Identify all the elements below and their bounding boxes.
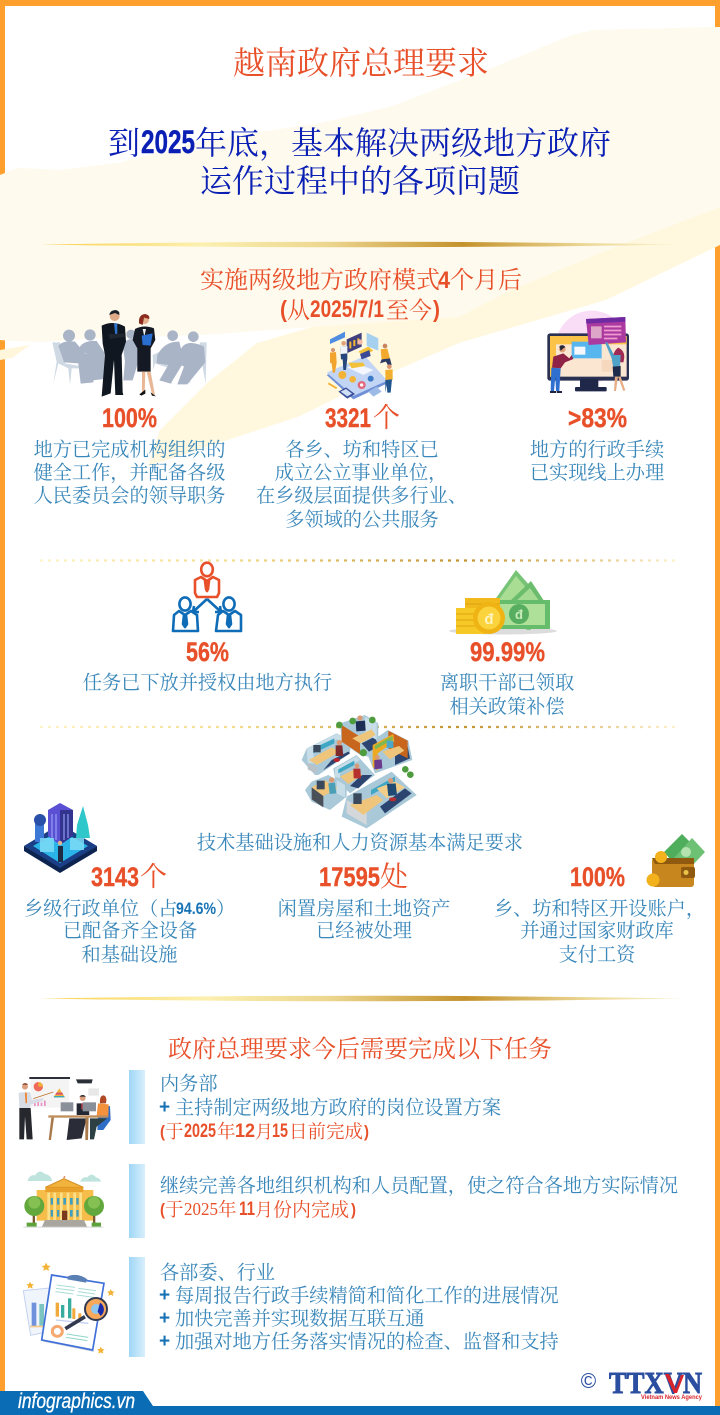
stat: 3143 units xyxy=(24,862,235,966)
section heading: four months: ) xyxy=(433,296,440,322)
stat: 100% accounts: 并通过国家财政库 xyxy=(520,920,674,942)
section heading: four months: 2025/7/1 xyxy=(310,296,384,323)
task text: 月 xyxy=(255,1122,273,1142)
subtitle xyxy=(108,124,611,199)
icon: government building xyxy=(23,1172,104,1228)
task text: 15 xyxy=(272,1121,288,1142)
icon: isometric public services xyxy=(327,332,393,399)
stat: 56% delegated: 56% xyxy=(186,637,229,667)
stat: 100% organisation xyxy=(34,403,225,507)
task text: + xyxy=(159,1097,170,1118)
icon: money and coins xyxy=(449,570,557,634)
section heading: four months: 至今 xyxy=(386,298,432,323)
stat: 17595 sites: 闲置房屋和土地资产 xyxy=(278,898,450,920)
stat: 100% accounts: 100% xyxy=(570,862,625,892)
task text: 内务部 xyxy=(160,1073,218,1095)
stat: 100% organisation: 地方已完成机构组织的 xyxy=(34,439,225,461)
icon: money and coins: đ xyxy=(515,607,523,622)
task text: 2025 xyxy=(184,1121,216,1142)
stat: 3321 public units: 多领域的公共服务 xyxy=(285,509,439,531)
task text: 日前完成 xyxy=(289,1122,363,1143)
icon: smart building xyxy=(24,803,97,873)
stat: 3143 units: 94.6% xyxy=(176,899,216,918)
stat: 3143 units: ） xyxy=(216,898,235,920)
task text: 加强对地方任务落实情况的检查、监督和支持 xyxy=(175,1331,559,1353)
section heading: four months xyxy=(200,267,522,323)
task text: 年 xyxy=(217,1121,236,1143)
accent bar xyxy=(129,1070,145,1144)
task text: 11 xyxy=(239,1199,255,1220)
task 2: organisation xyxy=(23,1164,678,1238)
stat: 3321 public units: 个 xyxy=(373,403,400,433)
task text: 份内完成 xyxy=(273,1199,349,1221)
gold divider xyxy=(40,996,685,1001)
stat: 3321 public units xyxy=(256,403,467,531)
stat: 17595 sites: 已经被处理 xyxy=(316,920,412,942)
icon: money and coins: đ xyxy=(484,611,494,628)
stat: >83% online: 已实现线上办理 xyxy=(530,462,664,484)
task text xyxy=(159,1073,501,1143)
section heading: four months: 从 xyxy=(287,298,310,323)
stat: 99.99% compensation: 离职干部已领取 xyxy=(440,672,574,694)
task text xyxy=(160,1175,678,1221)
logo: TTXVN: TTXVN xyxy=(609,1365,702,1400)
task text: 各部委、行业 xyxy=(160,1262,275,1284)
accent bar xyxy=(129,1164,145,1238)
stat: 3143 units: 和基础设施 xyxy=(82,944,177,966)
task 1: Ministry of Home Affairs xyxy=(19,1070,501,1144)
task text: ) xyxy=(364,1122,369,1141)
task text: 于 xyxy=(165,1122,184,1143)
stat: 100% organisation: 健全工作，并配备各级 xyxy=(34,462,225,484)
stat: 3143 units: 个 xyxy=(140,862,167,892)
stat: 100% accounts: 支付工资 xyxy=(559,944,636,966)
section heading: four months: 个月后 xyxy=(450,267,522,294)
stat: 99.99% compensation: 99.99% xyxy=(470,637,545,667)
section heading: four months: 4 xyxy=(438,267,451,294)
icon: wallet xyxy=(646,834,705,887)
stat: 100% accounts xyxy=(494,862,705,966)
icon: online procedures xyxy=(547,311,629,393)
stat: 3321 public units: 各乡、坊和特区已 xyxy=(285,439,439,461)
task text: 12 xyxy=(235,1121,255,1142)
stat: 56% delegated: 任务已下放并授权由地方执行 xyxy=(83,672,332,694)
task text: 加快完善并实现数据互联互通 xyxy=(175,1308,424,1330)
task text xyxy=(159,1262,559,1353)
task text: 于 xyxy=(165,1200,184,1221)
stat: 100% accounts: 乡、坊和特区开设账户， xyxy=(494,898,705,920)
logo: TTXVN: © xyxy=(581,1370,597,1393)
stat: 100% organisation: 100% xyxy=(102,403,157,433)
stat: 56% delegated xyxy=(83,637,332,694)
section heading: infrastructure: 技术基础设施和人力资源基本满足要求 xyxy=(197,832,523,854)
task text: ) xyxy=(351,1200,356,1219)
stat: 100% organisation: 人民委员会的领导职务 xyxy=(34,485,225,507)
task text: 月 xyxy=(255,1200,273,1220)
stat: 17595 sites: 17595 xyxy=(319,862,380,892)
subtitle: 到 xyxy=(108,125,140,161)
icon: business people xyxy=(52,310,207,397)
stat: 3321 public units: 在乡级层面提供多行业、 xyxy=(256,485,467,507)
task text: 每周报告行政手续精简和简化工作的进展情况 xyxy=(175,1285,559,1307)
stat: 17595 sites xyxy=(278,861,450,942)
task text: + xyxy=(159,1308,170,1329)
logo: TTXVN xyxy=(581,1365,702,1401)
stat: 17595 sites: 处 xyxy=(380,861,408,893)
task 3: ministries xyxy=(23,1257,559,1357)
section heading: tasks: 政府总理要求今后需要完成以下任务 xyxy=(168,1036,552,1063)
stat: 99.99% compensation xyxy=(440,637,574,718)
footer bar: infographics.vn xyxy=(18,1390,135,1413)
task text: 主持制定两级地方政府的岗位设置方案 xyxy=(175,1097,501,1119)
task text: + xyxy=(159,1331,170,1352)
stat: 3321 public units: 3321 xyxy=(325,403,371,433)
icon: clipboard and magnifier xyxy=(23,1263,115,1354)
task text: 年 xyxy=(218,1199,237,1221)
stat: 99.99% compensation: 相关政策补偿 xyxy=(449,696,565,718)
stat: >83% online: >83% xyxy=(568,403,627,433)
stat: >83% online xyxy=(530,403,664,484)
stat: 3143 units: 3143 xyxy=(91,862,139,892)
stat: 3143 units: 已配备齐全设备 xyxy=(63,920,197,942)
subtitle: 2025 xyxy=(141,124,195,160)
icon: delegation people xyxy=(173,563,241,631)
task text: 2025 xyxy=(184,1199,218,1219)
subtitle: 运作过程中的各项问题 xyxy=(200,163,520,199)
stat: >83% online: 地方的行政手续 xyxy=(530,439,664,461)
task text: ( xyxy=(160,1200,165,1219)
footer bar xyxy=(0,1390,720,1415)
task text: ( xyxy=(160,1122,165,1141)
logo: TTXVN: Vietnam News Agency xyxy=(641,1394,702,1401)
accent bar xyxy=(129,1257,145,1357)
task text: 继续完善各地组织机构和人员配置，使之符合各地方实际情况 xyxy=(160,1175,678,1197)
title: 越南政府总理要求 xyxy=(233,45,489,81)
icon: presentation xyxy=(19,1077,111,1140)
task text: + xyxy=(159,1285,170,1306)
subtitle: 年底，基本解决两级地方政府 xyxy=(195,125,611,161)
icon: isometric office xyxy=(302,715,417,828)
gold divider xyxy=(40,242,680,247)
stat: 3321 public units: 成立公立事业单位， xyxy=(275,462,447,484)
section heading: four months: 实施两级地方政府模式 xyxy=(200,267,440,294)
stat: 3143 units: 乡级行政单位（占 xyxy=(24,898,178,920)
cream brush background xyxy=(0,27,720,466)
section heading: four months: ( xyxy=(280,296,287,322)
